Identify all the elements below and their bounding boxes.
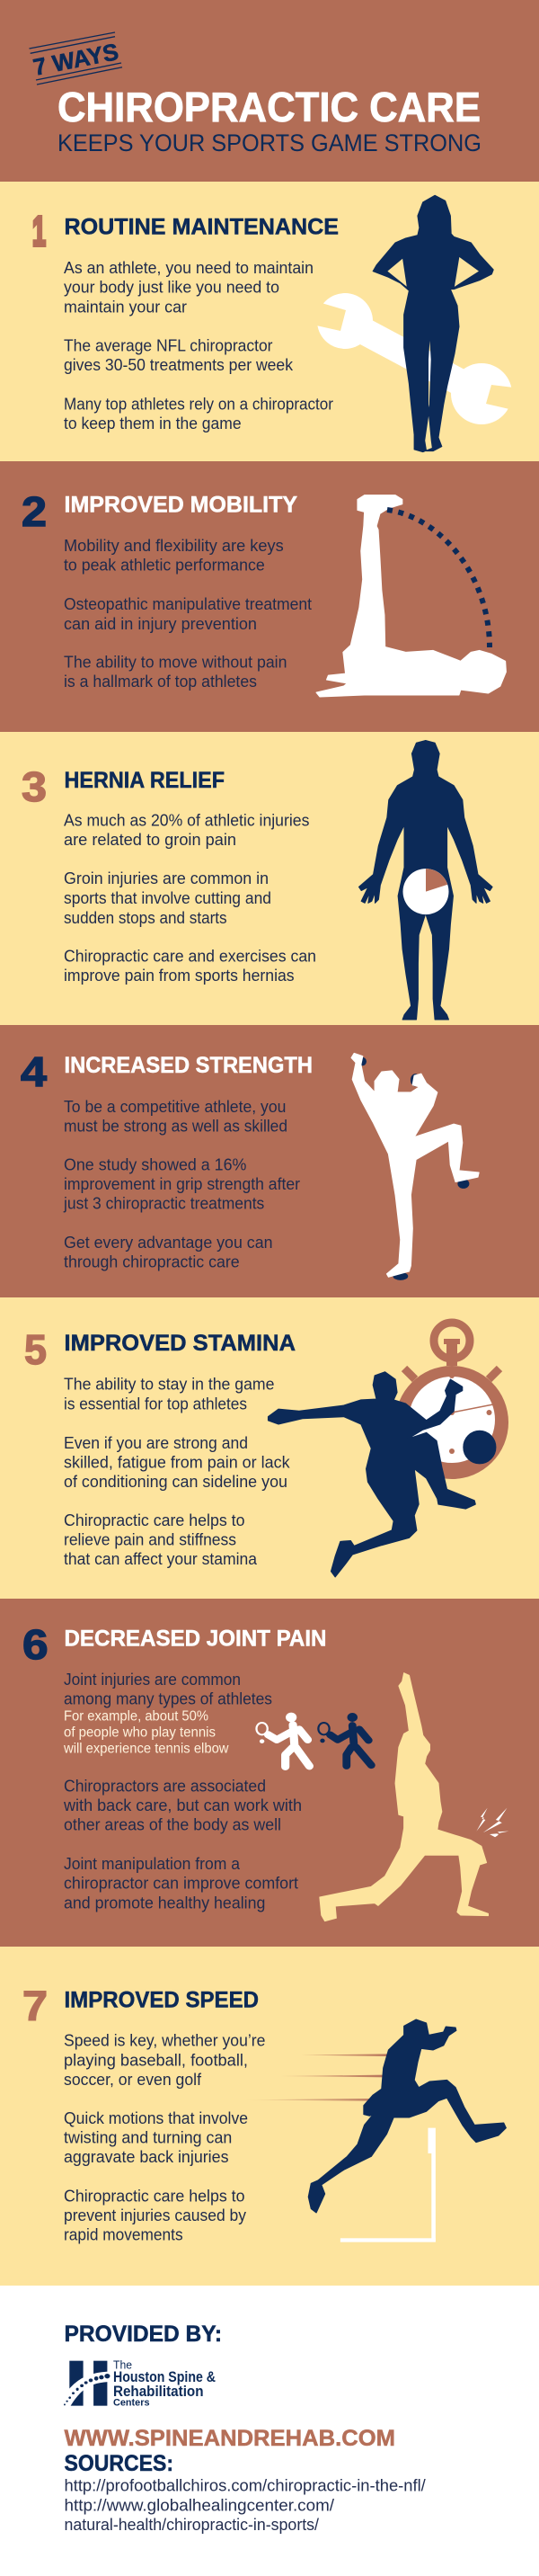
icon: athlete with weights — [351, 1053, 479, 1280]
text block — [63, 1098, 300, 1270]
logo: Houston Spine and Rehabilitation Centers: Centers — [113, 2397, 149, 2408]
sources heading: SOURCES: — [65, 2451, 173, 2476]
sources list: http://www.globalhealingcenter.com/ — [65, 2496, 334, 2514]
text block: just 3 chiropractic treatments — [63, 1195, 264, 1213]
panel: footer — [0, 2286, 539, 2576]
text block: soccer, or even golf — [64, 2071, 202, 2089]
text block: One study showed a 16% — [64, 1156, 246, 1174]
text block: can aid in injury prevention — [64, 615, 257, 633]
panel: improved stamina — [0, 1297, 539, 1599]
number 3: 3 — [22, 763, 47, 810]
text block: Groin injuries are common in — [64, 869, 269, 887]
text block — [64, 811, 316, 985]
text block: Joint injuries are common — [64, 1671, 241, 1689]
text block: of conditioning can sideline you — [64, 1473, 287, 1491]
text block: that can affect your stamina — [64, 1550, 258, 1568]
logo: Houston Spine and Rehabilitation Centers: The — [113, 2358, 132, 2371]
text block: Chiropractors are associated — [64, 1778, 266, 1796]
text block: The ability to stay in the game — [64, 1376, 274, 1394]
text block: maintain your car — [64, 299, 187, 316]
icon: hurdle — [340, 2128, 436, 2242]
text block: among many types of athletes — [64, 1690, 272, 1708]
text block: improvement in grip strength after — [64, 1175, 300, 1193]
text block: aggravate back injuries — [64, 2148, 228, 2166]
panel: improved speed — [0, 1947, 539, 2286]
text block: will experience tennis elbow — [63, 1741, 229, 1756]
website: WWW.SPINEANDREHAB.COM — [65, 2426, 395, 2451]
text block: chiropractor can improve comfort — [64, 1875, 298, 1893]
text block: Joint manipulation from a — [64, 1855, 241, 1873]
title: CHIROPRACTIC CARE — [57, 84, 481, 130]
logo: Houston Spine and Rehabilitation Centers — [62, 2358, 216, 2410]
logo: Houston Spine and Rehabilitation Centers: Houston Spine & — [113, 2369, 216, 2385]
icon: stopwatch — [395, 1323, 508, 1479]
panel: improved mobility — [0, 461, 539, 732]
heading: DECREASED JOINT PAIN — [65, 1626, 327, 1651]
text block: is essential for top athletes — [64, 1395, 247, 1413]
pie chart: 20% groin — [402, 869, 449, 914]
text block: rapid movements — [64, 2226, 183, 2244]
text block: are related to groin pain — [64, 831, 236, 849]
text block: The average NFL chiropractor — [64, 337, 273, 355]
text block: skilled, fatigue from pain or lack — [64, 1453, 291, 1471]
number 7: 7 — [22, 1982, 48, 2028]
icon: white tennis player — [256, 1713, 309, 1767]
number 1: 1 — [32, 208, 46, 254]
text block: The ability to move without pain — [64, 653, 287, 671]
text block: must be strong as well as skilled — [64, 1117, 287, 1135]
heading: ROUTINE MAINTENANCE — [65, 214, 339, 239]
icon: pain lightning — [476, 1808, 508, 1837]
number 4: 4 — [21, 1048, 47, 1095]
text block: As an athlete, you need to maintain — [64, 259, 314, 277]
text block: relieve pain and stiffness — [64, 1531, 236, 1549]
icon: lunging woman — [320, 1673, 488, 1921]
number 5: 5 — [24, 1326, 47, 1373]
text block — [64, 1376, 291, 1568]
text block: For example, about 50% — [64, 1708, 208, 1724]
text block: through chiropractic care — [64, 1252, 240, 1270]
text block: sports that involve cutting and — [64, 889, 271, 907]
number 6: 6 — [22, 1621, 49, 1668]
text block: prevent injuries caused by — [64, 2206, 246, 2224]
panel: routine maintenance — [0, 182, 539, 461]
text block: to keep them in the game — [64, 414, 242, 432]
text block: other areas of the body as well — [64, 1816, 281, 1834]
text block: is a hallmark of top athletes — [64, 673, 257, 691]
heading: IMPROVED MOBILITY — [65, 493, 297, 518]
panel: hernia relief — [0, 732, 539, 1025]
heading: IMPROVED STAMINA — [65, 1331, 296, 1356]
text block — [64, 537, 312, 691]
text block: Speed is key, whether you’re — [64, 2032, 265, 2050]
text block: Get every advantage you can — [64, 1234, 273, 1252]
text block: As much as 20% of athletic injuries — [64, 811, 309, 829]
heading: HERNIA RELIEF — [65, 768, 225, 793]
text block: To be a competitive athlete, you — [64, 1098, 286, 1116]
icon: hurdler — [308, 2019, 506, 2213]
text block: Osteopathic manipulative treatment — [64, 595, 312, 613]
text block: with back care, but can work with — [63, 1796, 302, 1814]
text block: Mobility and flexibility are keys — [64, 537, 284, 555]
icon: speed lines — [241, 2054, 390, 2101]
text block: Even if you are strong and — [64, 1434, 248, 1452]
text block: twisting and turning can — [64, 2129, 232, 2147]
heading: IMPROVED SPEED — [65, 1987, 259, 2012]
subtitle: KEEPS YOUR SPORTS GAME STRONG — [57, 129, 482, 156]
text block — [64, 259, 333, 432]
icon: man silhouette — [359, 741, 492, 1020]
sources list — [65, 2477, 426, 2534]
sources list: http://profootballchiros.com/chiropractic-in-the-nfl/ — [65, 2477, 426, 2495]
text block: improve pain from sports hernias — [64, 967, 295, 985]
text block: Chiropractic care helps to — [64, 2187, 244, 2205]
text block: and promote healthy healing — [64, 1894, 265, 1912]
sources list: natural-health/chiropractic-in-sports/ — [65, 2516, 319, 2534]
number 2: 2 — [22, 488, 47, 535]
panel: decreased joint pain — [0, 1599, 539, 1947]
icon: dotted arc — [387, 510, 490, 647]
text block: gives 30-50 treatments per week — [64, 356, 294, 374]
text block: to peak athletic performance — [64, 556, 265, 574]
text block: sudden stops and starts — [64, 909, 227, 927]
text block: Quick motions that involve — [64, 2109, 248, 2127]
text block — [64, 2032, 265, 2244]
icon: soccer player — [269, 1372, 496, 1577]
text block: playing baseball, football, — [64, 2051, 248, 2069]
provided by heading: PROVIDED BY: — [65, 2322, 222, 2347]
icon: wrench — [301, 293, 530, 424]
icon: person raising leg — [316, 495, 506, 697]
text block: Chiropractic care helps to — [64, 1511, 244, 1529]
text block: of people who play tennis — [64, 1725, 216, 1741]
7 ways badge: 7 WAYS — [31, 38, 120, 81]
panel: header — [0, 0, 539, 182]
heading: INCREASED STRENGTH — [65, 1053, 313, 1078]
text block: your body just like you need to — [64, 279, 279, 297]
icon: woman silhouette — [373, 195, 493, 452]
icon: navy tennis player — [318, 1713, 371, 1766]
text block: Many top athletes rely on a chiropractor — [64, 396, 333, 414]
text block: Chiropractic care and exercises can — [64, 948, 316, 966]
text block — [63, 1671, 302, 1912]
logo: Houston Spine and Rehabilitation Centers: Rehabilitation — [113, 2384, 203, 2400]
panel: increased strength — [0, 1025, 539, 1297]
